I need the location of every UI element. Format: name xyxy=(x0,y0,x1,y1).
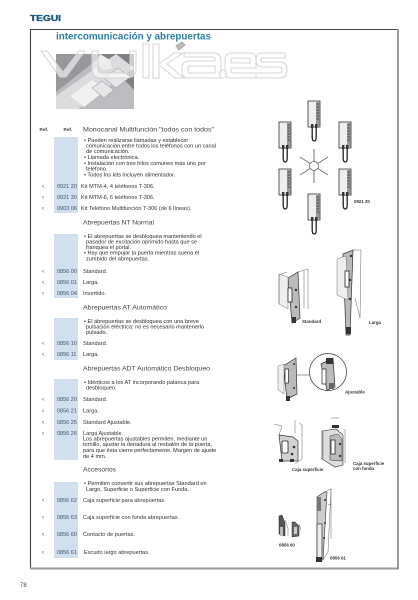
rows: AT Automático: 0856 11 xyxy=(57,352,76,358)
title: intercomunicación y abrepuertas xyxy=(56,32,212,42)
rows: ADT: Standard. xyxy=(83,397,108,403)
page number: 78 xyxy=(20,583,27,589)
rows: ADT: 0856 21 xyxy=(57,408,77,414)
section: Abrepuertas NT Normal: zumbido del abrepuertas. xyxy=(86,256,150,262)
rows: kits: ‹ xyxy=(42,195,44,201)
rows: kits: ‹ xyxy=(42,206,44,212)
illustration: intercom network xyxy=(279,101,370,234)
section: Monocanal Multifunción: • Todos los kits incluyen alimentador. xyxy=(84,172,176,178)
section: Abrepuertas ADT Automático Desbloqueo xyxy=(83,366,210,392)
rows: ADT: de 4 mm. xyxy=(83,454,107,460)
section: Accesorios xyxy=(83,466,207,493)
column headers: Ref. xyxy=(40,127,48,132)
rows: ADT: tornillo, ajustar la denadura al resbalón de la puerta, xyxy=(83,442,212,448)
rows: Accesorios: 0856 60 xyxy=(57,532,77,538)
rows: NT Normal: ‹ xyxy=(42,269,44,275)
illustration: Caja superficie con funda xyxy=(322,418,385,471)
rows: AT Automático: ‹ xyxy=(42,352,44,358)
rows: kits: Kit MTM-6, 6 teléfonos T-306. xyxy=(81,195,155,201)
rows: AT Automático xyxy=(42,341,108,358)
rows: kits: 0921 20 xyxy=(57,184,77,190)
illustration: 0856 60 contact xyxy=(279,515,301,548)
section: Abrepuertas ADT Automático Desbloqueo: • Idénticos a los AT incorporando palanca para xyxy=(84,380,200,386)
section: Monocanal Multifunción xyxy=(83,126,216,178)
section: Abrepuertas NT Normal: pasador de excitación oprimido hasta que se xyxy=(86,240,197,246)
section: Accesorios: Accesorios xyxy=(83,466,117,474)
rows: ADT: 0856 20 xyxy=(57,397,77,403)
rows: kits: 0903 06 xyxy=(57,206,77,212)
section: Abrepuertas NT Normal: • El abrepuertas se desbloquea manteniendo el xyxy=(84,234,202,240)
section: Abrepuertas NT Normal: franquea el portal. xyxy=(86,245,132,251)
section: Abrepuertas AT Automático: • El abrepuertas se desbloquea con una breve xyxy=(84,319,199,325)
rows: ADT: 0856 25 xyxy=(57,420,77,426)
rows: ADT: Larga. xyxy=(83,408,99,414)
rows: ADT: Los abrepuertas ajustables permiten, mediante un xyxy=(83,436,207,442)
section: Abrepuertas AT Automático: Abrepuertas AT Automático xyxy=(83,304,167,312)
rows: Accesorios: Escudo largo abrepuertas. xyxy=(84,550,150,556)
rows: Accesorios: Caja superficie para abrepuertas. xyxy=(83,498,166,504)
rows: AT Automático: 0856 10 xyxy=(57,341,77,347)
rows: ADT: Larga Ajustable. xyxy=(83,431,124,437)
rows: ADT: ‹ xyxy=(42,420,44,426)
rows: Accesorios: ‹ xyxy=(42,498,44,504)
rows: NT Normal xyxy=(42,269,108,297)
illustration: intercom network: 0921 20 xyxy=(354,199,370,204)
rows: AT Automático: Larga. xyxy=(83,352,99,358)
rows: kits: ‹ xyxy=(42,184,44,190)
rows: ADT: ‹ xyxy=(42,408,44,414)
blue code column xyxy=(54,137,78,558)
rows: NT Normal: 0856 01 xyxy=(57,280,77,286)
illustration: lock Larga xyxy=(337,250,382,335)
rows: NT Normal: ‹ xyxy=(42,291,44,297)
rows: Accesorios: 0856 61 xyxy=(57,550,77,556)
rows: ADT: ‹ xyxy=(42,397,44,403)
rows: ADT: para que ésta cierre perfectamente. Margen de ajuste xyxy=(83,448,216,454)
illustration: 0856 61 long escutcheon xyxy=(316,489,346,562)
section: Abrepuertas AT Automático: pulsación eléctrica: no es necesario mantenerlo xyxy=(86,324,204,330)
rows: Accesorios: Caja superficie con funda abrepuertas. xyxy=(83,515,180,521)
column headers xyxy=(40,127,72,132)
rows: Accesorios: Contacto de puertas. xyxy=(83,532,135,538)
section: Abrepuertas AT Automático: pulsado. xyxy=(86,330,108,336)
section: Monocanal Multifunción: • Pueden realizarse llamadas y establecer xyxy=(84,138,188,144)
rows: kits: Kit MTM-4, 4 teléfonos T-306. xyxy=(81,184,155,190)
illustration: Caja superficie con funda: Caja superficie xyxy=(353,461,385,466)
section: Abrepuertas ADT Automático Desbloqueo: desbloqueo. xyxy=(86,386,117,392)
rows: NT Normal: Invertido. xyxy=(83,291,106,297)
main page frame xyxy=(30,29,398,568)
illustration: lock Ajustable with detail: Ajustable xyxy=(345,390,365,394)
rows: AT Automático: Standard. xyxy=(83,341,108,347)
illustration: lock Larga: Larga xyxy=(369,320,382,325)
illustration: Caja superficie: Caja superficie xyxy=(292,467,324,472)
illustration: 0856 60 contact: 0856 60 xyxy=(279,542,295,548)
section: Monocanal Multifunción: de comunicación. xyxy=(86,149,130,155)
rows: ADT: Standard Ajustable. xyxy=(83,420,132,426)
section: Monocanal Multifunción: teléfono. xyxy=(86,166,108,172)
section: Abrepuertas NT Normal xyxy=(83,220,202,262)
rows: NT Normal: 0856 04 xyxy=(57,291,77,297)
rows: NT Normal: 0856 00 xyxy=(57,269,77,275)
section: Accesorios: Largo, Superficie o Superficie con Funda. xyxy=(86,487,189,493)
rows: NT Normal: ‹ xyxy=(42,280,44,286)
logo: TEGUI xyxy=(30,14,61,23)
rows: AT Automático: ‹ xyxy=(42,341,44,347)
rows: ADT xyxy=(42,397,216,460)
illustration: 0856 61 long escutcheon: 0856 61 xyxy=(330,556,346,560)
illustration: lock Standard xyxy=(279,269,321,324)
section: Monocanal Multifunción: comunicación entre todos los teléfonos con un canal xyxy=(86,144,216,150)
column headers: Ref. xyxy=(64,127,72,132)
section: Accesorios: • Permiten convertir sus abrepuertas Standard en xyxy=(84,481,207,487)
section: Abrepuertas ADT Automático Desbloqueo: Abrepuertas ADT Automático Desbloqueo xyxy=(83,366,210,372)
section: Monocanal Multifunción: Monocanal Multifunción "todos con todos" xyxy=(83,126,215,134)
rows: NT Normal: Larga. xyxy=(83,280,99,286)
rows: Accesorios: ‹ xyxy=(42,515,44,521)
section: Monocanal Multifunción: • Instalación con tres hilos comunes más uno por xyxy=(84,161,206,167)
illustration: Caja superficie con funda: con funda xyxy=(353,466,375,471)
rows: NT Normal: Standard. xyxy=(83,269,108,275)
photo of intercom keypad xyxy=(56,54,134,109)
watermark: vulka.es xyxy=(41,42,287,78)
rows: kits xyxy=(42,184,192,212)
rows: ADT: 0856 26 xyxy=(57,431,77,437)
illustration: lock Ajustable with detail xyxy=(278,354,365,401)
rows: Accesorios: ‹ xyxy=(42,532,44,538)
section: Abrepuertas NT Normal: Abrepuertas NT Normal xyxy=(83,220,155,226)
illustration: lock Standard: Standard xyxy=(302,319,321,324)
rows: Accesorios: ‹ xyxy=(42,550,44,556)
rows: Accesorios xyxy=(42,498,180,556)
section: Monocanal Multifunción: • Llamada electrónica. xyxy=(84,155,140,161)
section: Abrepuertas AT Automático xyxy=(83,304,204,336)
rows: kits: 0921 30 xyxy=(57,195,77,201)
rows: ADT: ‹ xyxy=(42,431,44,437)
rows: kits: Kit Teléfono Multifunción T-306 (de 6 líneas). xyxy=(81,206,192,212)
rows: Accesorios: 0856 62 xyxy=(57,498,77,504)
section: Abrepuertas NT Normal: • Hay que empujar la puerta mientras suena el xyxy=(84,250,199,256)
rows: Accesorios: 0856 63 xyxy=(57,515,77,521)
illustration: Caja superficie xyxy=(274,420,324,472)
